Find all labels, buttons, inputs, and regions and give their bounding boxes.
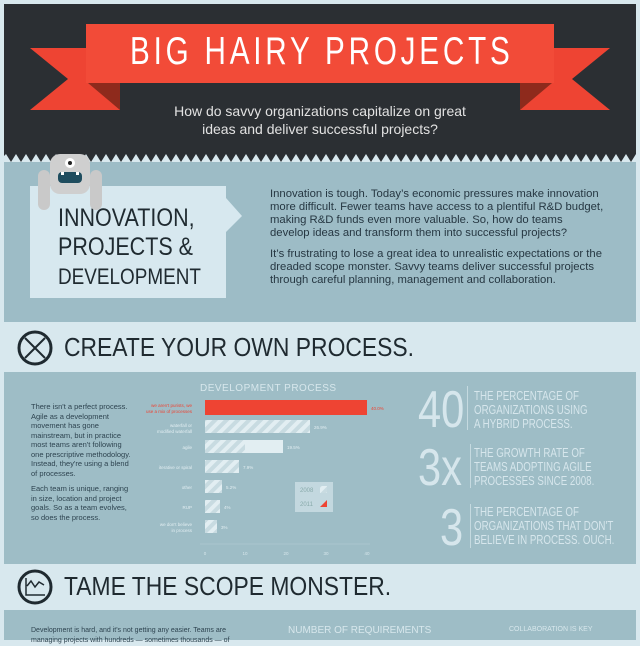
subtitle: [174, 103, 466, 137]
scope text: Development is hard, and it's not getting any easier. Teams are managing projects with hundreds — sometimes thousands — of: [31, 627, 229, 644]
stat: 3: 3: [440, 499, 463, 557]
bar chart: development process: modified waterfall: [157, 429, 192, 434]
bar chart: development process: 30: [323, 551, 329, 556]
panel: intro: [4, 162, 636, 322]
icon: arrows circle: [18, 330, 52, 366]
intro heading box: INNOVATION,: [58, 204, 195, 232]
bar chart: development process: we aren't purists, we: [151, 403, 192, 408]
header panel: [4, 4, 636, 162]
subtitle: How do savvy organizations capitalize on great: [174, 103, 466, 119]
title text: BIG HAIRY PROJECTS: [130, 30, 514, 73]
bar chart: development process: other: [182, 485, 192, 490]
bar chart: development process: [146, 383, 384, 556]
stat: 3x: 3x: [418, 439, 462, 497]
bar chart: development process: agile: [182, 445, 192, 450]
stat: 40: 40: [418, 381, 464, 439]
icon: monster: [38, 154, 102, 210]
bar chart: development process: 40.0%: [371, 406, 384, 411]
panel: process: [4, 372, 636, 564]
bar chart: development process: 0: [204, 551, 207, 556]
stat: 3: ORGANIZATIONS THAT DON'T: [474, 519, 613, 533]
stat: 3x: THE GROWTH RATE OF: [474, 446, 585, 460]
bar chart: development process: 2011: [300, 502, 314, 508]
process text: There isn't a perfect process. Agile as a development movement has gone mainstream, but in practice most teams aren't following one prescriptive methodology. Instead, they're using a blend of processes.: [31, 402, 130, 478]
bar chart: development process: iterative or spiral: [159, 465, 192, 470]
stat: 3x: [418, 439, 594, 497]
bar chart: development process: DEVELOPMENT PROCESS: [200, 383, 337, 394]
process text: Each team is unique, ranging in size, location and project goals. So as a team evolves, so does the process.: [31, 484, 128, 522]
bar chart: development process: use a mix of processes: [146, 409, 193, 414]
intro text: [270, 188, 603, 286]
stat: 3: THE PERCENTAGE OF: [474, 505, 579, 519]
process text: [31, 402, 130, 522]
icon: chart circle: [18, 570, 52, 604]
bar chart: development process: in process: [171, 528, 193, 533]
stat: 40: ORGANIZATIONS USING: [474, 403, 588, 417]
intro heading box: DEVELOPMENT: [58, 264, 201, 289]
legend: [295, 482, 333, 512]
bar chart: development process: 7.9%: [243, 465, 253, 470]
bar chart: development process: 3%: [221, 525, 228, 530]
bar chart: development process: 10: [242, 551, 248, 556]
bar chart: development process: waterfall or: [170, 423, 192, 428]
bar chart: development process: we don't believe: [160, 522, 192, 527]
subtitle: ideas and deliver successful projects?: [202, 121, 438, 137]
callout: collaboration: COLLABORATION IS KEY: [509, 626, 593, 633]
bar chart: development process: RUP: [182, 505, 192, 510]
stat: 3: BELIEVE IN PROCESS. OUCH.: [474, 533, 614, 547]
bar chart: development process: 20: [283, 551, 289, 556]
stat: 3: [440, 499, 614, 557]
bar chart: development process: 5.2%: [226, 485, 236, 490]
intro text: It’s frustrating to lose a great idea to unrealistic expectations or the dreaded scope monster. Savvy teams deliver successful projects through careful planning, management and collaboration.: [270, 248, 602, 286]
stat: 3x: PROCESSES SINCE 2008.: [474, 474, 594, 488]
bar chart: development process: 4%: [224, 505, 231, 510]
stat: 40: [418, 381, 588, 439]
panel: scope: [4, 610, 636, 640]
chart title: number of requirements: NUMBER OF REQUIREMENTS: [288, 625, 431, 636]
bar chart: development process: 2008: [300, 488, 314, 494]
section heading: tame the scope monster: TAME THE SCOPE MONSTER.: [64, 571, 391, 601]
stat: 40: THE PERCENTAGE OF: [474, 389, 579, 403]
title ribbon: [30, 24, 610, 110]
bar chart: development process: 26.9%: [314, 425, 327, 430]
stat: 40: A HYBRID PROCESS.: [474, 417, 573, 431]
section heading: create your own process: CREATE YOUR OWN PROCESS.: [64, 332, 414, 362]
stat: 3x: TEAMS ADOPTING AGILE: [474, 460, 592, 474]
intro text: Innovation is tough. Today’s economic pressures make innovation more difficult. Fewer teams have access to a plentiful R&D budget, making R&D funds even more valuable. So, how do teams develop ideas and transform them into successful projects?: [270, 188, 603, 239]
intro heading box: PROJECTS &: [58, 233, 193, 261]
bar chart: development process: 19.5%: [287, 445, 300, 450]
intro heading box: [30, 186, 242, 298]
bar chart: development process: 40: [364, 551, 370, 556]
